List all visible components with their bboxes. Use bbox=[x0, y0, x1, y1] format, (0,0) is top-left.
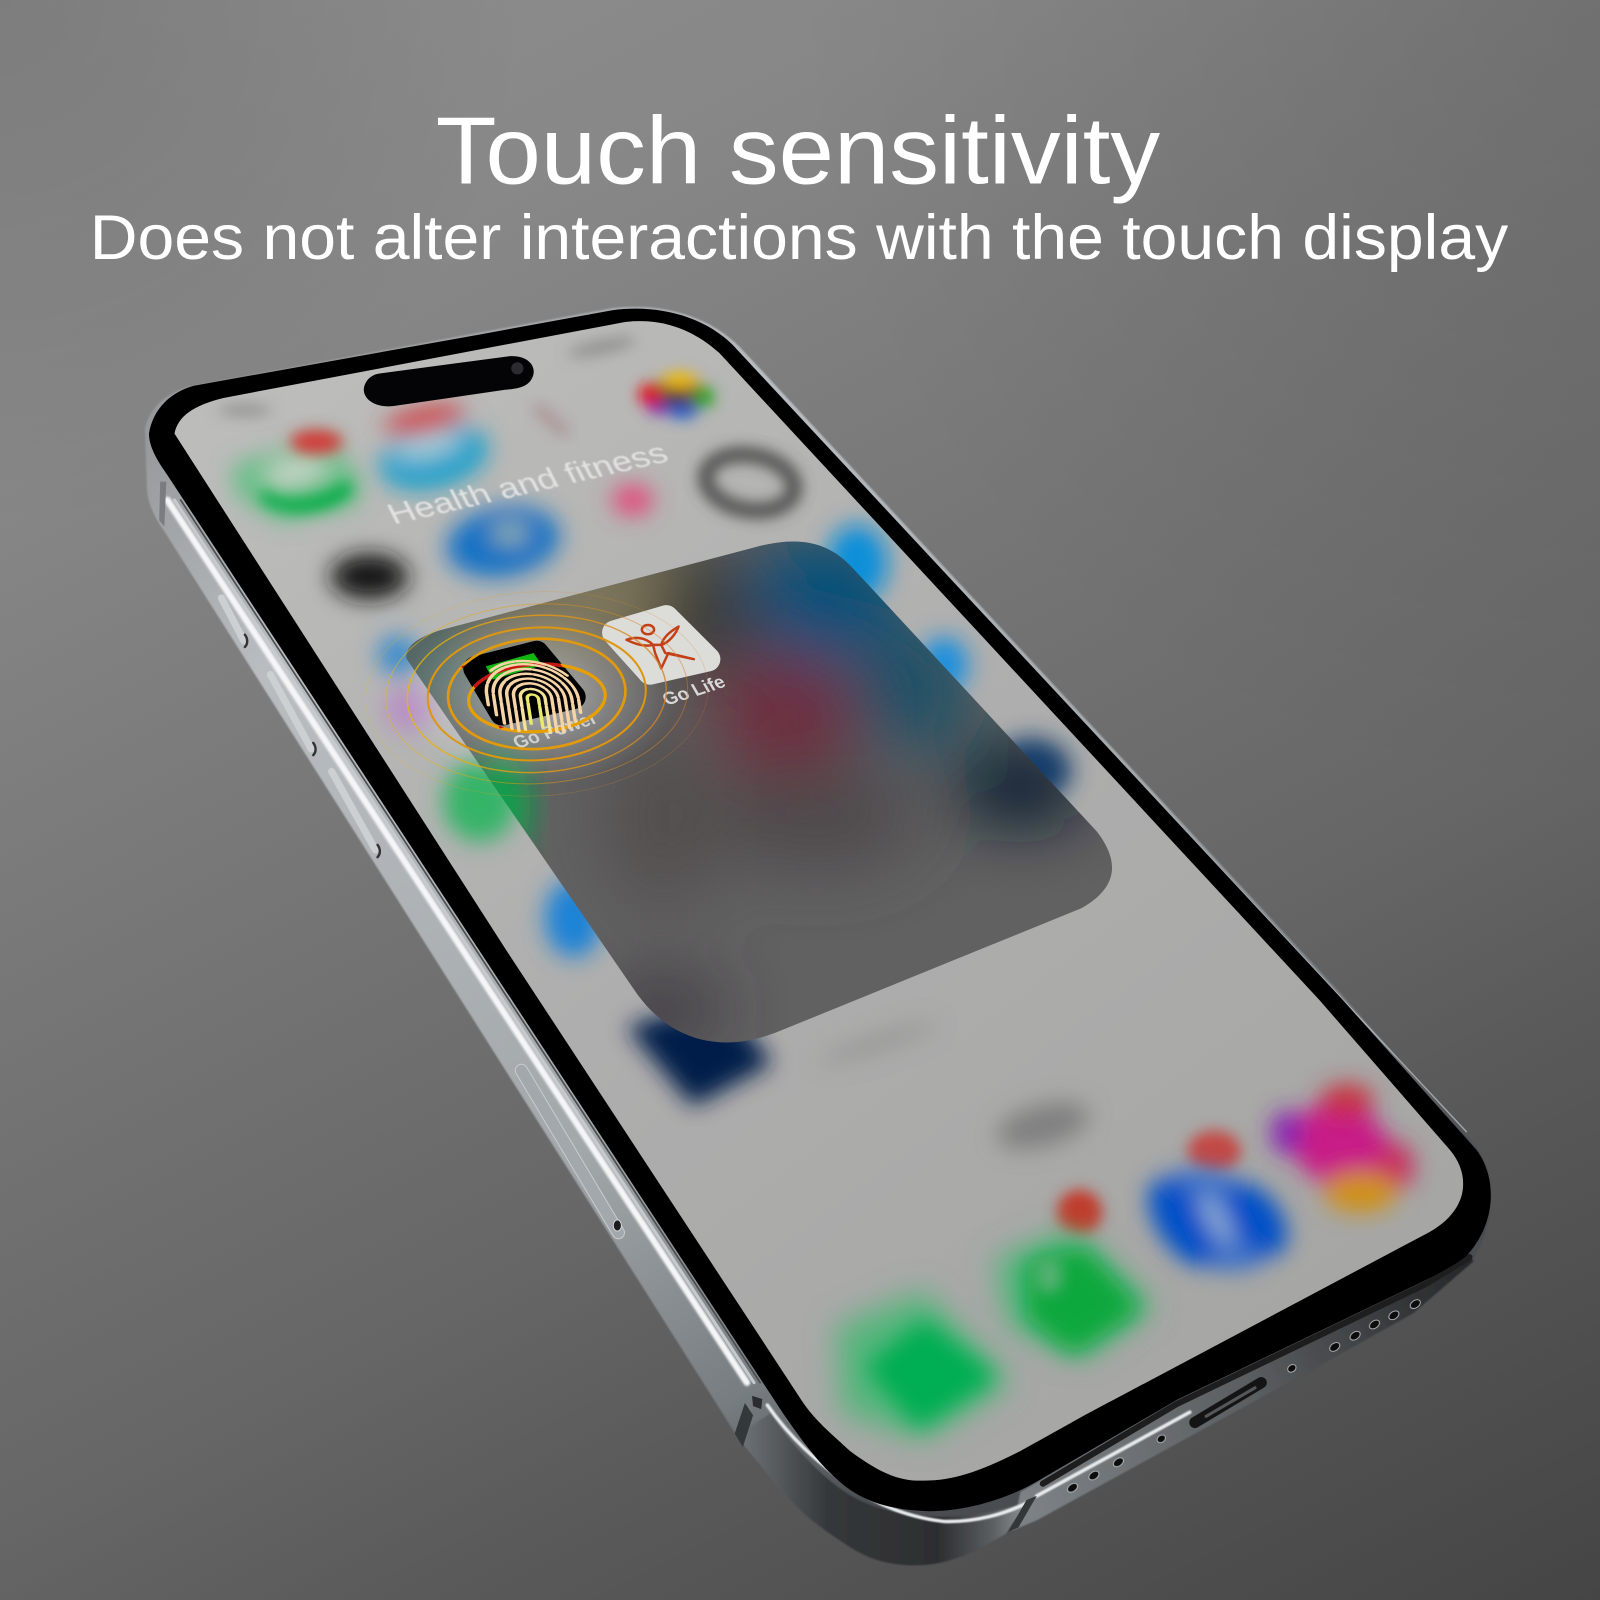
label: Go Power: Go Power bbox=[509, 708, 601, 752]
speaker and microphone holes bbox=[1066, 1298, 1422, 1494]
SIM tray bbox=[521, 1070, 621, 1233]
frame highlights bbox=[167, 500, 1469, 1522]
camera lens bbox=[511, 362, 523, 374]
blurred status bar bbox=[218, 334, 637, 415]
title: Touch sensitivity bbox=[436, 98, 1160, 205]
phone bottom corner bbox=[737, 1413, 1027, 1565]
blurred colour wheel icon bbox=[639, 372, 714, 418]
blurred navy icon bbox=[635, 1008, 765, 1100]
phone metal frame bbox=[145, 307, 1491, 1565]
folder panel bbox=[388, 520, 1143, 1071]
phone bbox=[143, 296, 1500, 1565]
dock icon: green phone bbox=[995, 1230, 1153, 1357]
phone bottom side bbox=[1012, 1253, 1473, 1531]
blurred red badges bbox=[290, 430, 1241, 1235]
touch glow bbox=[399, 606, 674, 786]
section label: Health and fitness bbox=[382, 437, 674, 531]
USB-C port bbox=[1195, 1383, 1261, 1422]
dock icon: blue browser bbox=[1133, 1148, 1300, 1290]
green phone crescent bbox=[259, 480, 353, 512]
black bezel bbox=[149, 309, 1491, 1511]
blurred thin icon bbox=[536, 406, 566, 434]
icon: Go Power app bbox=[476, 653, 573, 713]
dock icon: green messages bbox=[837, 1291, 1010, 1439]
dynamic island bbox=[364, 356, 534, 406]
touch rings bbox=[360, 583, 713, 805]
label: Go Life: Go Life bbox=[658, 671, 729, 709]
icon: Go Life figure bbox=[627, 625, 694, 668]
volume and power buttons bbox=[221, 598, 380, 857]
antenna bands bbox=[159, 482, 1037, 1532]
red ring segments over icon bbox=[445, 634, 628, 754]
dock icon: instagram bbox=[1270, 1084, 1414, 1212]
icon: Go Life app bbox=[614, 617, 708, 672]
icon: fingerprint bbox=[481, 658, 584, 735]
phone screen bbox=[143, 296, 1500, 1520]
icon: battery level bbox=[486, 653, 542, 680]
blurred app icons bbox=[233, 400, 1093, 1157]
subtitle: Does not alter interactions with the touch display bbox=[90, 203, 1509, 273]
blurred settings ring icon bbox=[701, 448, 799, 518]
